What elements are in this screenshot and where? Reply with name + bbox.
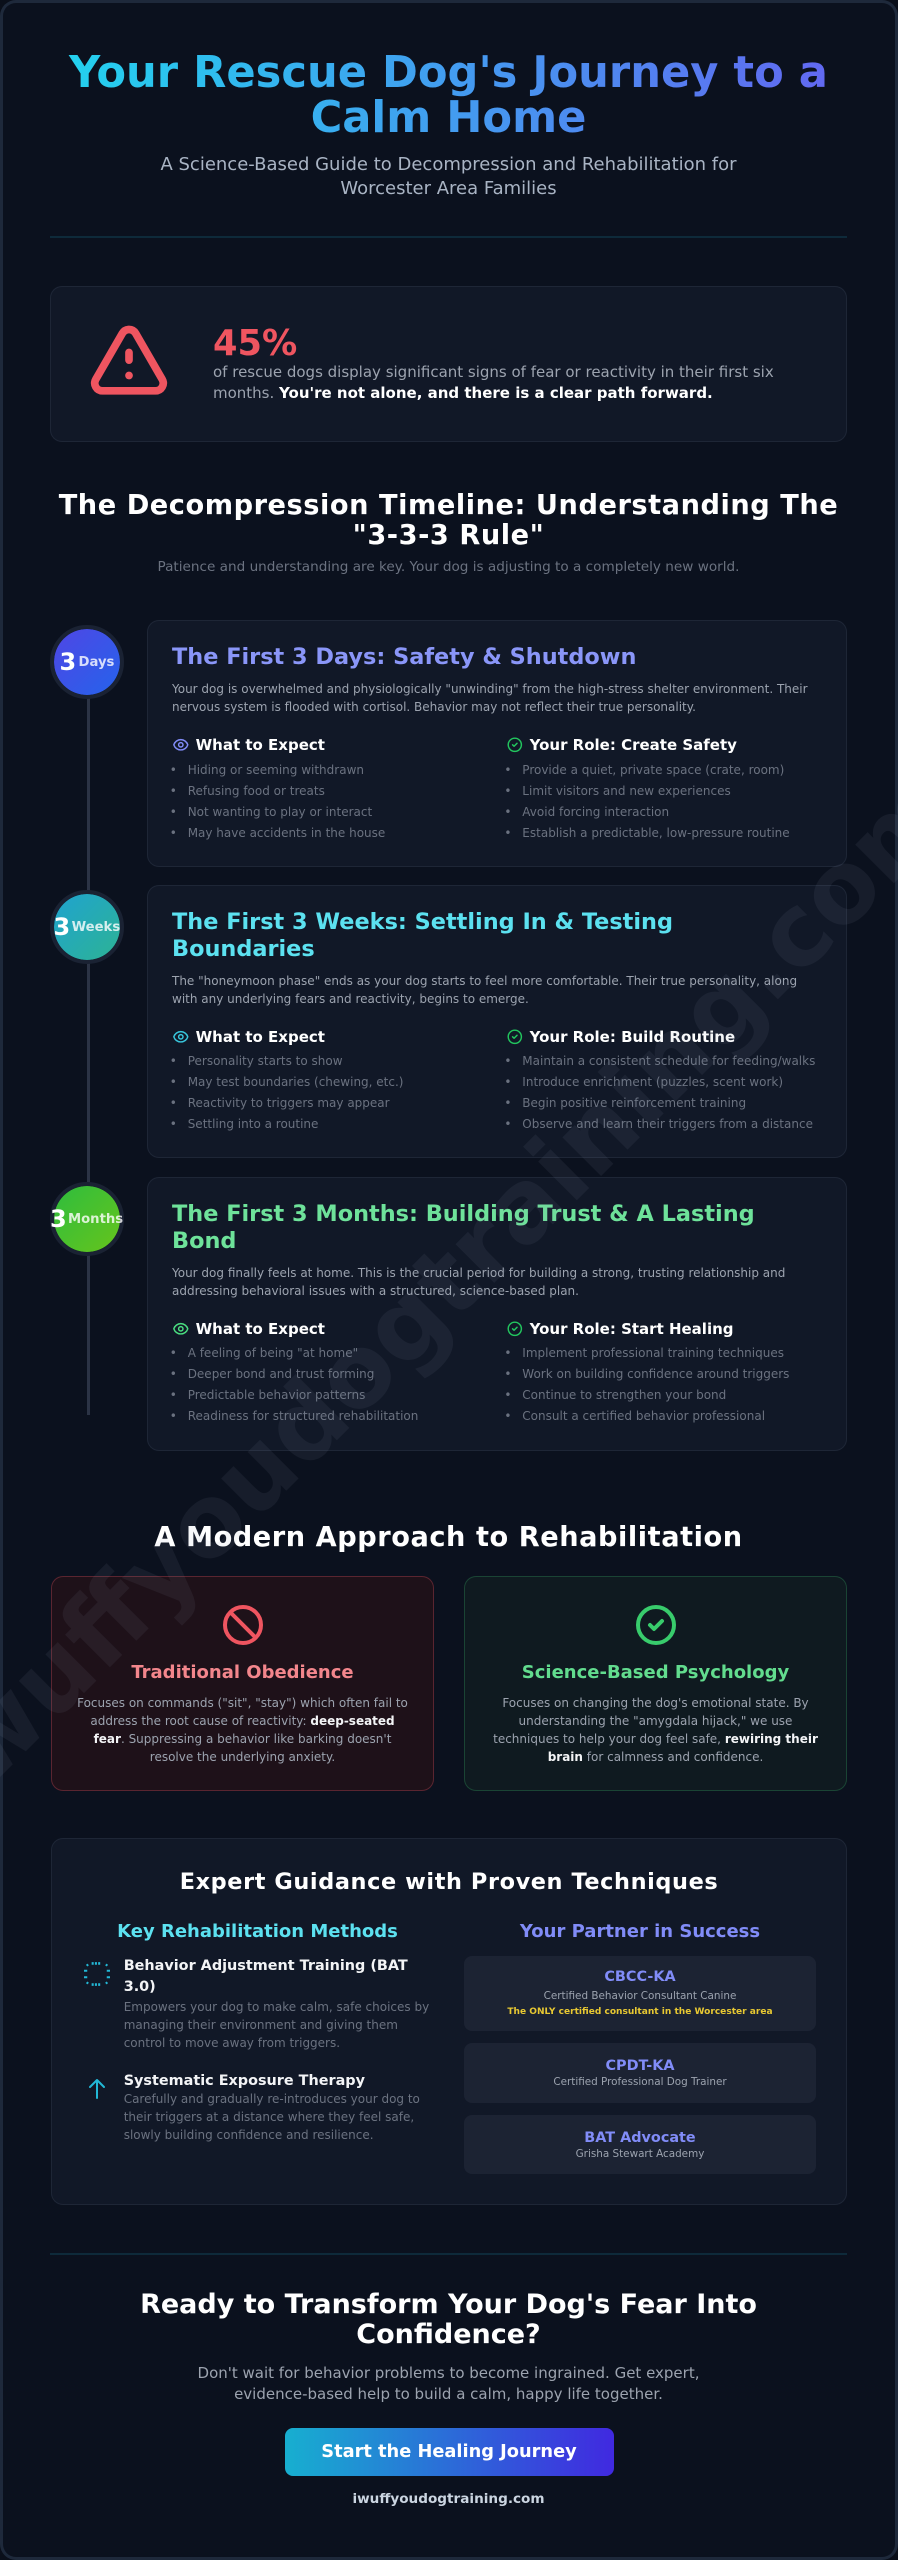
call to action heading: Confidence? [356, 2318, 541, 2350]
card description: with any underlying fears and reactivity, begins to emerge. [172, 992, 529, 1006]
call to action heading [140, 2288, 757, 2350]
call to action text: evidence-based help to build a calm, happy life together. [234, 2385, 663, 2403]
your role list: Begin positive reinforcement training [522, 1096, 746, 1110]
your role heading: Your Role: Start Healing [530, 1320, 734, 1338]
what to expect list: A feeling of being "at home" [188, 1346, 358, 1360]
subtitle: A Science-Based Guide to Decompression and Rehabilitation for [160, 154, 737, 175]
icon: arrow up [89, 2079, 105, 2099]
card heading: Science-Based Psychology [522, 1662, 789, 1682]
your role list: Avoid forcing interaction [522, 805, 669, 819]
icon: adjustment [84, 1962, 110, 1986]
method: BAT title [124, 1958, 408, 1995]
website link: iwuffyoudogtraining.com [352, 2490, 545, 2506]
title: Your Rescue Dog's Journey to a [69, 48, 828, 98]
timeline marker: 3 months [50, 1182, 124, 1256]
timeline marker: 3 days [50, 625, 124, 699]
stat text: months. You're not alone, and there is a clear path forward. [213, 384, 713, 402]
card text [493, 1696, 818, 1764]
what to expect list: Refusing food or treats [188, 784, 325, 798]
your role list: Maintain a consistent schedule for feeding/walks [522, 1054, 815, 1068]
your role list: Establish a predictable, low-pressure routine [522, 826, 790, 840]
your role list: Observe and learn their triggers from a distance [522, 1117, 813, 1131]
credential: CPDT-KA [464, 2043, 816, 2103]
card text: understanding the "amygdala hijack," we use [519, 1714, 792, 1728]
stat text [213, 362, 774, 402]
what to expect list: Reactivity to triggers may appear [188, 1096, 390, 1110]
card description: addressing behavioral issues with a structured, science-based plan. [172, 1284, 579, 1298]
what to expect list [172, 1054, 403, 1131]
timeline marker: 3 months: Months [68, 1212, 123, 1227]
method: BAT title: 3.0) [124, 1979, 156, 1995]
method: exposure description: Carefully and gradually re-introduces your dog to [124, 2092, 420, 2106]
credential: CBCC-KA: Certified Behavior Consultant Canine [544, 1990, 736, 2002]
credential: CBCC-KA: The ONLY certified consultant in the Worcester area [507, 2007, 773, 2017]
method: BAT description: managing their environment and giving them [124, 2018, 398, 2032]
your role list: Introduce enrichment (puzzles, scent work) [522, 1075, 783, 1089]
section heading: timeline: The Decompression Timeline: Understanding The [59, 490, 838, 521]
card description [172, 682, 808, 714]
your role list [506, 1346, 789, 1423]
icon: check circle [636, 1605, 676, 1645]
card text: fear. Suppressing a behavior like barking doesn't [94, 1732, 391, 1746]
section heading: timeline: "3-3-3 Rule" [353, 520, 544, 551]
method: BAT description: Empowers your dog to make calm, safe choices by [124, 2000, 429, 2014]
method: BAT description: control to move away from triggers. [124, 2036, 340, 2050]
button: Start the Healing Journey [321, 2441, 577, 2462]
card text: Focuses on changing the dog's emotional state. By [502, 1696, 809, 1710]
panel: science-based psychology [464, 1576, 847, 1791]
method: exposure description: their triggers at a distance where they feel safe, [124, 2110, 414, 2124]
panel: first 3 months [147, 1177, 847, 1451]
timeline marker: 3 months: 3 [50, 1205, 67, 1233]
column heading: methods: Key Rehabilitation Methods [117, 1920, 398, 1942]
panel: statistic callout [50, 286, 847, 442]
card heading [172, 908, 673, 962]
panel heading: Expert Guidance with Proven Techniques [180, 1869, 718, 1895]
your role list: Limit visitors and new experiences [522, 784, 731, 798]
method: exposure description: slowly building confidence and resilience. [124, 2128, 374, 2142]
card description: Your dog is overwhelmed and physiologically "unwinding" from the high-stress shelter environment. Their [172, 682, 808, 696]
your role list [506, 1054, 815, 1131]
card description: Your dog finally feels at home. This is the crucial period for building a strong, trusting relationship and [172, 1266, 785, 1280]
panel: first 3 weeks [147, 885, 847, 1158]
method: BAT description [124, 2000, 429, 2050]
your role heading: Your Role: Create Safety [530, 736, 737, 754]
timeline marker: 3 days: 3 [60, 648, 76, 676]
what to expect list: May test boundaries (chewing, etc.) [188, 1075, 403, 1089]
call to action text [198, 2364, 699, 2403]
card heading [172, 1200, 755, 1254]
card text: Focuses on commands ("sit", "stay") which often fail to [77, 1696, 408, 1710]
call to action heading: Ready to Transform Your Dog's Fear Into [140, 2288, 757, 2320]
what to expect list: May have accidents in the house [188, 826, 385, 840]
section heading: timeline [58, 490, 838, 551]
your role list [506, 763, 790, 840]
what to expect heading: What to Expect [196, 736, 325, 754]
what to expect list: Hiding or seeming withdrawn [188, 763, 364, 777]
what to expect list: Readiness for structured rehabilitation [188, 1409, 418, 1423]
call to action text: Don't wait for behavior problems to become ingrained. Get expert, [198, 2364, 699, 2382]
what to expect list [172, 1346, 418, 1423]
panel: traditional obedience [51, 1576, 434, 1791]
your role heading: Your Role: Build Routine [530, 1028, 735, 1046]
icon: ban [223, 1605, 263, 1645]
stat text: of rescue dogs display significant signs of fear or reactivity in their first six [213, 362, 774, 380]
card description: nervous system is flooded with cortisol. Behavior may not reflect their true personality. [172, 700, 696, 714]
title [50, 51, 847, 141]
title: Calm Home [311, 93, 586, 143]
card text: brain for calmness and confidence. [548, 1750, 763, 1764]
credential: CBCC-KA: CBCC-KA [604, 1969, 676, 1985]
timeline line [87, 690, 90, 1415]
card description [172, 1266, 785, 1298]
card heading: Bond [172, 1228, 236, 1254]
your role list: Implement professional training techniques [522, 1346, 784, 1360]
card heading: Boundaries [172, 936, 315, 962]
your role list: Provide a quiet, private space (crate, room) [522, 763, 784, 777]
what to expect heading: What to Expect [196, 1320, 325, 1338]
your role list: Consult a certified behavior professional [522, 1409, 765, 1423]
what to expect list: Predictable behavior patterns [188, 1388, 365, 1402]
card heading: The First 3 Weeks: Settling In & Testing [172, 908, 673, 934]
subtitle: Worcester Area Families [340, 178, 557, 199]
what to expect list: Deeper bond and trust forming [188, 1367, 374, 1381]
what to expect list: Personality starts to show [188, 1054, 343, 1068]
timeline marker: 3 weeks [50, 890, 124, 964]
section subheading: Patience and understanding are key. Your dog is adjusting to a completely new world. [158, 559, 739, 575]
card text: techniques to help your dog feel safe, rewiring their [493, 1732, 818, 1746]
what to expect list [172, 763, 385, 840]
card heading: The First 3 Months: Building Trust & A Lasting [172, 1200, 755, 1226]
timeline marker: 3 weeks: Weeks [72, 920, 120, 935]
icon: warning triangle [90, 326, 168, 395]
stat number: 45% [213, 323, 297, 364]
button [284, 2428, 614, 2476]
what to expect list: Not wanting to play or interact [188, 805, 372, 819]
card text: address the root cause of reactivity: deep-seated [90, 1714, 395, 1728]
method: BAT title: Behavior Adjustment Training (BAT [124, 1958, 408, 1974]
column heading: partner: Your Partner in Success [520, 1920, 760, 1942]
subtitle [160, 154, 737, 199]
credential: BAT Advocate: BAT Advocate [584, 2130, 696, 2146]
your role list: Continue to strengthen your bond [522, 1388, 726, 1402]
credential: CBCC-KA [464, 1956, 816, 2031]
credential: BAT Advocate [464, 2115, 816, 2174]
method: exposure title: Systematic Exposure Therapy [124, 2073, 365, 2089]
method: exposure description [124, 2092, 420, 2142]
credential: BAT Advocate: Grisha Stewart Academy [576, 2148, 704, 2160]
credential: CPDT-KA: CPDT-KA [605, 2058, 674, 2074]
card text [77, 1696, 408, 1764]
card heading: The First 3 Days: Safety & Shutdown [172, 644, 636, 670]
card description [172, 974, 797, 1006]
panel: expert guidance [51, 1838, 847, 2205]
section heading: modern approach: A Modern Approach to Rehabilitation [154, 1522, 743, 1553]
what to expect list: Settling into a routine [188, 1117, 318, 1131]
card description: The "honeymoon phase" ends as your dog starts to feel more comfortable. Their true personality, along [172, 974, 797, 988]
card text: resolve the underlying anxiety. [150, 1750, 335, 1764]
timeline marker: 3 weeks: 3 [54, 913, 70, 941]
your role list: Work on building confidence around triggers [522, 1367, 789, 1381]
timeline marker: 3 days: Days [78, 655, 114, 670]
panel: first 3 days [147, 620, 847, 867]
card heading: Traditional Obedience [131, 1662, 354, 1682]
credential: CPDT-KA: Certified Professional Dog Trainer [553, 2076, 727, 2088]
what to expect heading: What to Expect [196, 1028, 325, 1046]
